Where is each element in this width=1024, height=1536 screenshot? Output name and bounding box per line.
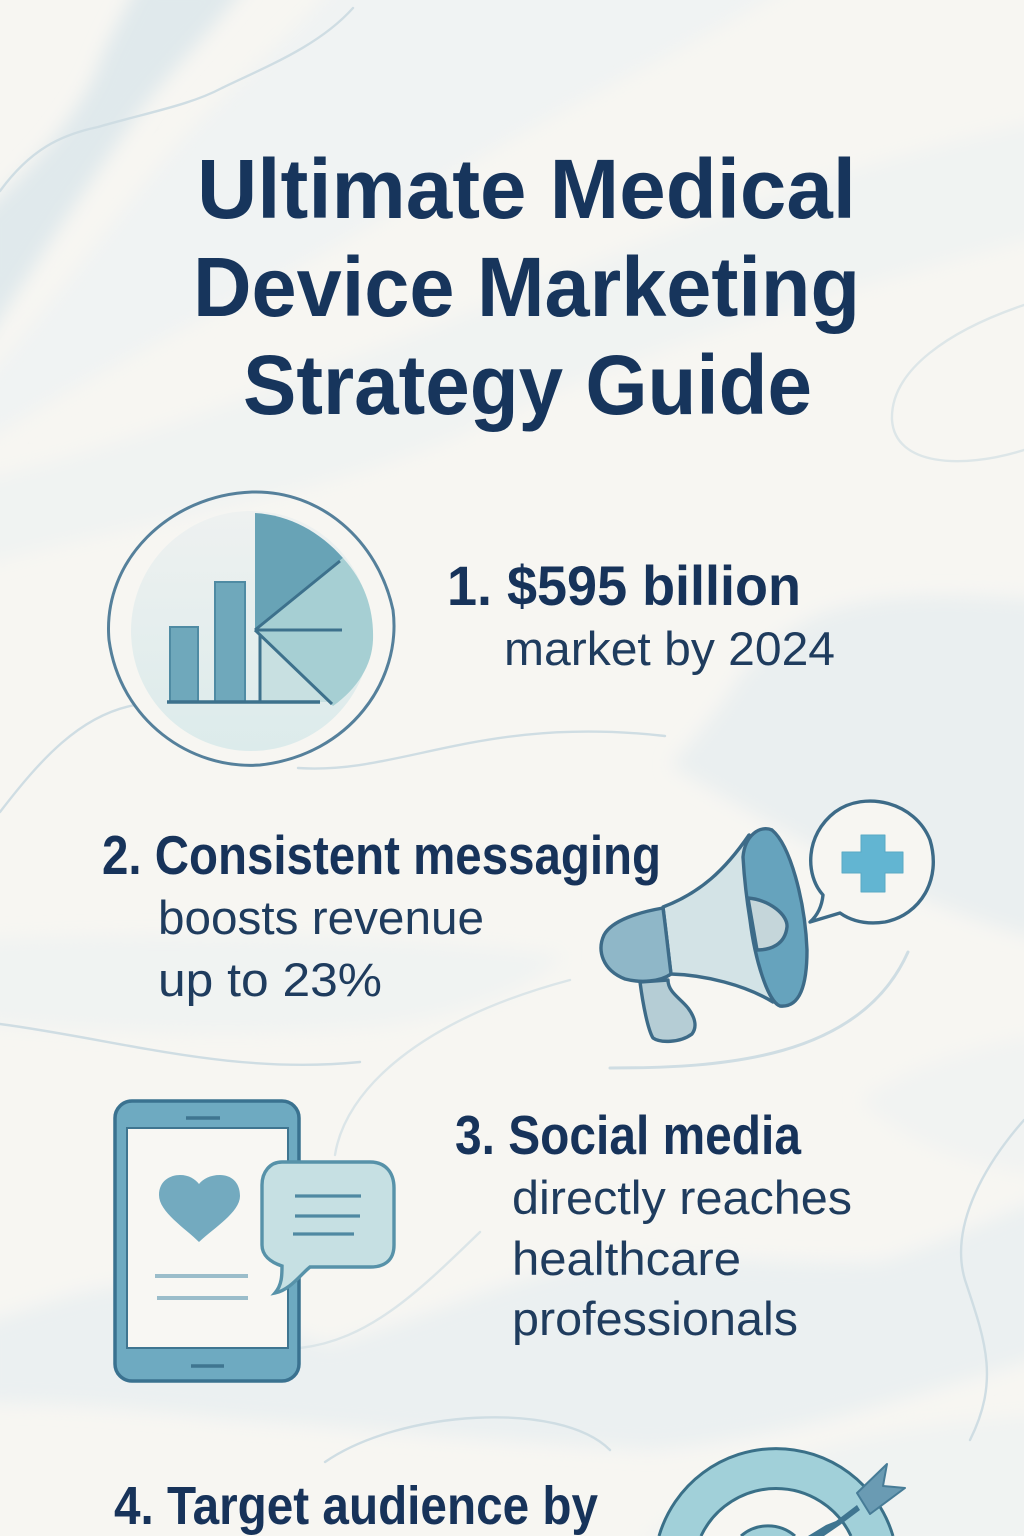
text: item 2 <box>102 824 661 1006</box>
title: Ultimate Medical <box>197 142 856 236</box>
text: item 1 <box>447 554 835 675</box>
text: item 2: up to 23% <box>158 953 382 1006</box>
icon: phone with heart and speech bubble <box>115 1101 394 1381</box>
icon: target with arrow <box>659 1449 905 1536</box>
icon: megaphone with medical speech bubble <box>601 801 933 1041</box>
text: item 4: 4. Target audience by <box>114 1476 598 1536</box>
text: item 1: 1. $595 billion <box>447 554 801 617</box>
title: Device Marketing <box>193 240 860 334</box>
text: item 3: professionals <box>512 1292 798 1345</box>
text: item 3: 3. Social media <box>455 1104 801 1166</box>
text: item 3: healthcare <box>512 1232 741 1285</box>
text: item 3 <box>455 1104 852 1345</box>
title <box>193 142 860 432</box>
text: item 1: market by 2024 <box>504 622 835 675</box>
text: item 3: directly reaches <box>512 1171 852 1224</box>
title: Strategy Guide <box>243 338 812 432</box>
icon: bar and pie chart in a circle <box>109 492 394 765</box>
text: item 2: boosts revenue <box>158 891 484 944</box>
text: item 2: 2. Consistent messaging <box>102 824 661 886</box>
